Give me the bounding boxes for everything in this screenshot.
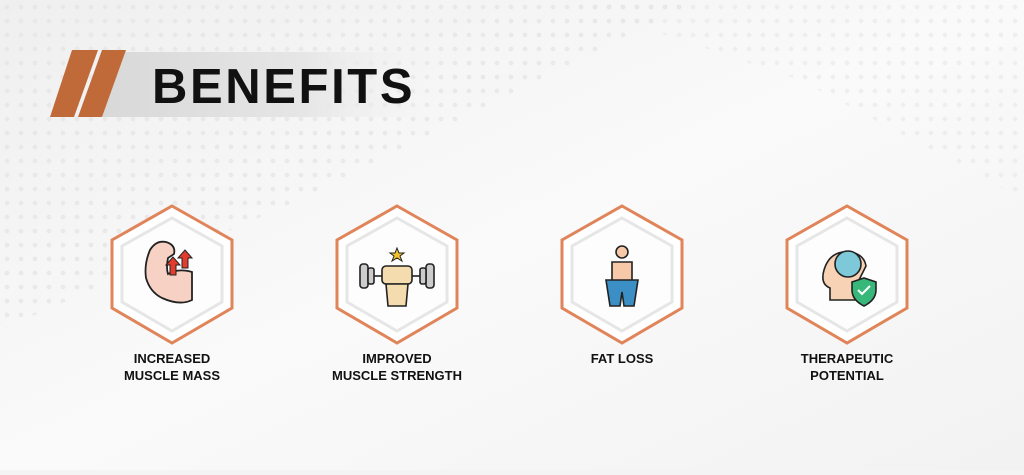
benefit: improved muscle strength: MUSCLE STRENGTH [332, 368, 462, 383]
benefit: therapeutic potential [787, 206, 907, 383]
benefit: therapeutic potential: THERAPEUTIC [801, 351, 894, 366]
icon: head with brain and shield [823, 251, 876, 306]
icon: person with loose pants [606, 246, 638, 306]
benefit: increased muscle mass [112, 206, 232, 383]
icon: fist with dumbbells [360, 248, 434, 306]
title banner: BENEFITS [152, 60, 415, 114]
benefit: fat loss: FAT LOSS [591, 351, 654, 366]
icon: flexed arm [146, 242, 192, 303]
benefit: therapeutic potential: POTENTIAL [810, 368, 884, 383]
benefit: improved muscle strength: IMPROVED [362, 351, 432, 366]
benefit: increased muscle mass: INCREASED [134, 351, 210, 366]
benefit: fat loss [562, 206, 682, 366]
benefit: improved muscle strength [332, 206, 462, 383]
title banner [50, 50, 440, 117]
benefit: increased muscle mass: MUSCLE MASS [124, 368, 220, 383]
